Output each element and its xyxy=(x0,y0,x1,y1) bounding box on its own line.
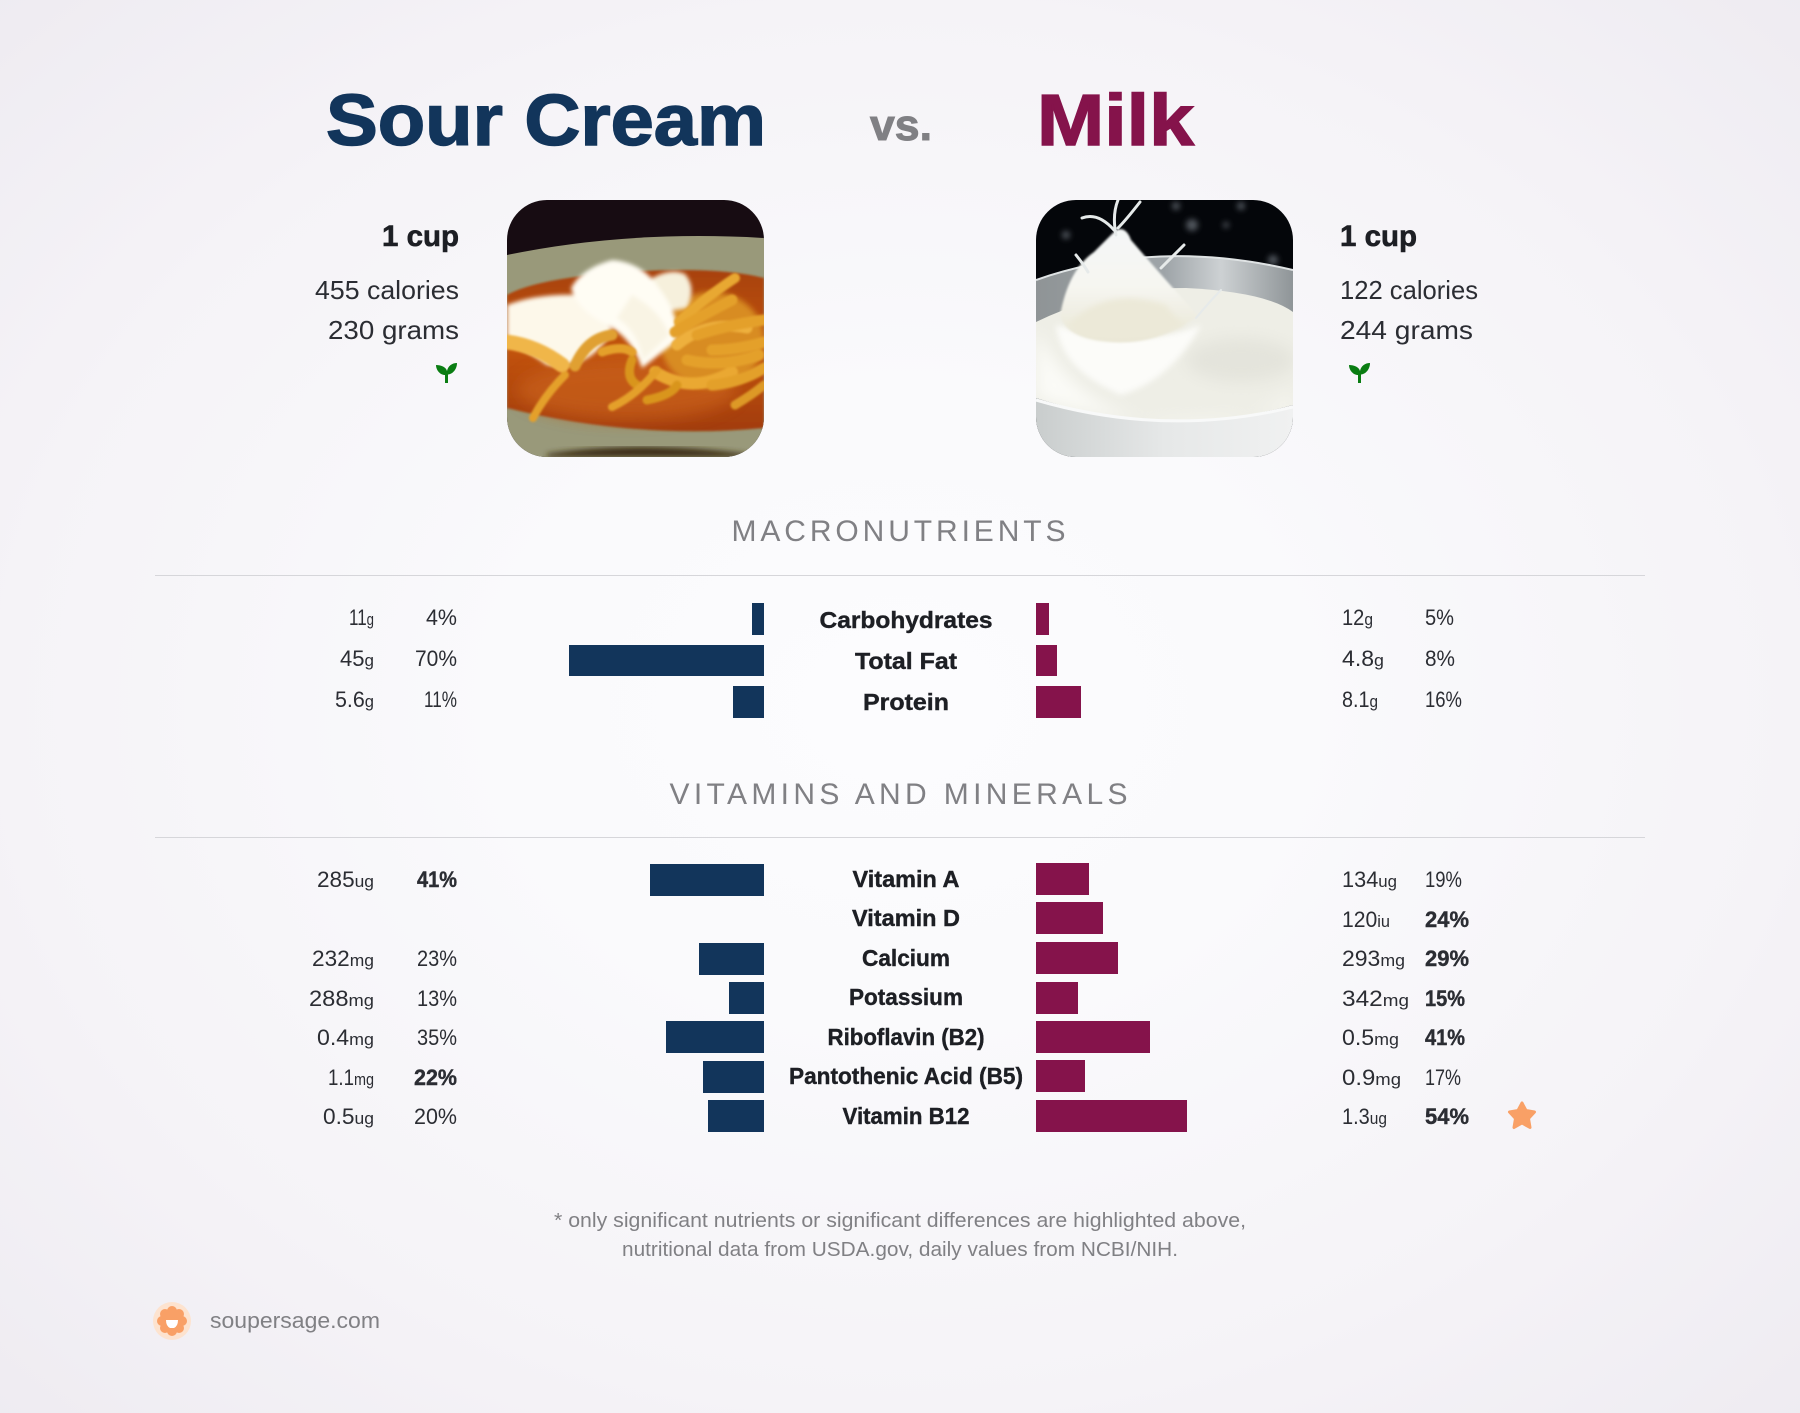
vitamins right values: 15% xyxy=(1425,986,1465,1011)
vitamins right values: 1.3ug xyxy=(1342,1104,1387,1129)
macronutrients right values: 5% xyxy=(1425,605,1454,630)
photo: sour cream soup xyxy=(507,200,764,457)
vitamins left values: 23% xyxy=(417,946,457,971)
macronutrients right values xyxy=(1342,605,1462,712)
bottom glass xyxy=(1036,398,1293,457)
macronutrients left values: 11% xyxy=(424,687,457,712)
macronutrients left values: 70% xyxy=(415,646,457,671)
icon: sprout right xyxy=(1349,363,1370,383)
title: Milk: Milk xyxy=(1037,81,1195,161)
Sour Cream serving info xyxy=(315,220,459,345)
macronutrients right values: 4.8g xyxy=(1342,646,1384,671)
heading: macronutrients: MACRONUTRIENTS xyxy=(732,515,1066,548)
macronutrients right values: 8.1g xyxy=(1342,687,1378,712)
macronutrients labels: Carbohydrates xyxy=(820,607,992,633)
vitamins left values: 1.1mg xyxy=(328,1065,374,1090)
macronutrients left values xyxy=(335,605,457,712)
vitamins left values: 232mg xyxy=(312,946,374,971)
macronutrients right values: 8% xyxy=(1425,646,1455,671)
vitamins left values: 35% xyxy=(417,1025,457,1050)
vitamins right values: 17% xyxy=(1425,1065,1461,1090)
vitamins labels: Vitamin D xyxy=(852,905,960,931)
vitamins labels: Calcium xyxy=(862,945,950,971)
Sour Cream serving info: 1 cup xyxy=(382,220,459,253)
vitamins left values: 20% xyxy=(414,1104,457,1129)
footer: site name: soupersage.com xyxy=(210,1308,380,1333)
heading: vitamins and minerals: VITAMINS AND MINERALS xyxy=(670,778,1128,811)
vitamins labels: Pantothenic Acid (B5) xyxy=(789,1063,1023,1089)
macronutrients right bars xyxy=(1036,603,1081,718)
vitamins right values: 293mg xyxy=(1342,946,1405,971)
vitamins labels: Riboflavin (B2) xyxy=(828,1024,984,1050)
vitamins labels: Vitamin A xyxy=(852,866,960,892)
Sour Cream serving info: 230 grams xyxy=(328,315,459,345)
vitamins left values: 288mg xyxy=(309,986,374,1011)
icon: soupersage logo xyxy=(153,1302,191,1340)
cream blobs xyxy=(507,260,692,368)
macronutrients right values: 12g xyxy=(1342,605,1373,630)
Sour Cream serving info: 455 calories xyxy=(315,275,459,305)
macronutrients left values: 11g xyxy=(349,605,374,630)
vs. label: vs. xyxy=(870,101,932,150)
vitamins right values: 134ug xyxy=(1342,867,1397,892)
vitamins left bars xyxy=(650,864,764,1132)
vitamins left values: 0.5ug xyxy=(323,1104,374,1129)
Milk serving info: 122 calories xyxy=(1340,275,1478,305)
macronutrients labels xyxy=(820,607,992,715)
vitamins right values: 0.9mg xyxy=(1342,1065,1401,1090)
crown xyxy=(1060,228,1174,343)
vitamins right values: 19% xyxy=(1425,867,1462,892)
vitamins right values: 120iu xyxy=(1342,907,1390,932)
title: Sour Cream: Sour Cream xyxy=(326,81,766,161)
cheese strands xyxy=(507,278,764,418)
macronutrients left values: 4% xyxy=(426,605,457,630)
vitamins right values: 54% xyxy=(1425,1104,1469,1129)
vitamins labels: Potassium xyxy=(849,984,963,1010)
macronutrients labels: Protein xyxy=(863,689,949,715)
vitamins right bars xyxy=(1036,863,1187,1132)
Milk serving info: 244 grams xyxy=(1340,315,1473,345)
Milk serving info xyxy=(1340,220,1478,345)
vitamins labels: Vitamin B12 xyxy=(842,1103,970,1129)
vitamins right values: 24% xyxy=(1425,907,1469,932)
vitamins labels xyxy=(789,866,1023,1129)
vitamins left values: 22% xyxy=(414,1065,457,1090)
photo: milk splash xyxy=(1036,200,1296,457)
vitamins right values: 0.5mg xyxy=(1342,1025,1399,1050)
vitamins right values: 342mg xyxy=(1342,986,1409,1011)
macronutrients left bars xyxy=(569,603,764,718)
vitamins right values xyxy=(1342,867,1469,1129)
icon: star xyxy=(1510,1103,1534,1128)
vitamins left values xyxy=(309,867,457,1129)
vitamins left values: 41% xyxy=(417,867,457,892)
vitamins left values: 13% xyxy=(417,986,457,1011)
Milk serving info: 1 cup xyxy=(1340,220,1417,253)
vitamins right values: 29% xyxy=(1425,946,1469,971)
glass rim xyxy=(1036,257,1293,322)
macronutrients left values: 5.6g xyxy=(335,687,374,712)
vitamins right values: 41% xyxy=(1425,1025,1465,1050)
icon: sprout left xyxy=(436,363,457,383)
macronutrients right values: 16% xyxy=(1425,687,1462,712)
vitamins left values: 285ug xyxy=(317,867,374,892)
macronutrients labels: Total Fat xyxy=(855,648,957,674)
vitamins left values: 0.4mg xyxy=(317,1025,374,1050)
footnote xyxy=(554,1210,1246,1261)
footnote: nutritional data from USDA.gov, daily values from NCBI/NIH. xyxy=(622,1239,1178,1261)
macronutrients left values: 45g xyxy=(340,646,374,671)
milk surface xyxy=(1036,288,1293,421)
footnote: * only significant nutrients or significant differences are highlighted above, xyxy=(554,1210,1246,1232)
